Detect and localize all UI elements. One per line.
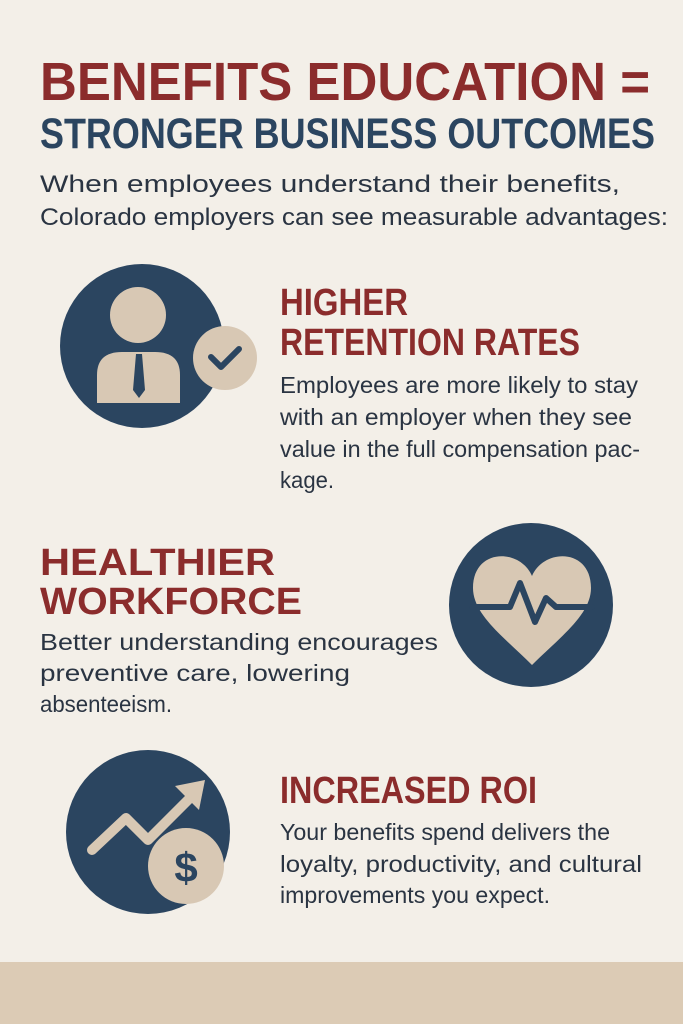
section 3: increased roi: loyalty, productivity, and cultural	[280, 851, 642, 877]
subtitle: When employees understand their benefits,	[40, 171, 620, 198]
footer band	[0, 962, 683, 1024]
section 1: higher retention rates	[279, 282, 640, 493]
section 2: healthier workforce: WORKFORCE	[40, 581, 302, 623]
section 1: higher retention rates: kage.	[280, 467, 334, 493]
section 1: higher retention rates: HIGHER	[280, 282, 408, 324]
subtitle: Colorado employers can see measurable advantages:	[40, 204, 668, 231]
section 3: increased roi: INCREASED ROI	[280, 770, 537, 812]
icon: growth arrow with dollar: $	[174, 844, 198, 891]
section 2: healthier workforce: preventive care, lowering	[40, 660, 350, 686]
section 1: higher retention rates: Employees are more likely to stay	[280, 372, 639, 398]
section 3: increased roi: improvements you expect.	[280, 882, 550, 908]
section 2: healthier workforce	[40, 542, 438, 717]
title	[40, 52, 655, 158]
section 2: healthier workforce: HEALTHIER	[40, 542, 275, 584]
section 2: healthier workforce: absenteeism.	[40, 691, 172, 717]
icon: employee with check	[60, 264, 257, 428]
subtitle	[40, 171, 668, 231]
icon: growth arrow with dollar	[66, 750, 230, 914]
section 1: higher retention rates: RETENTION RATES	[280, 322, 580, 364]
section 1: higher retention rates: with an employer when they see	[279, 404, 632, 430]
section 1: higher retention rates: value in the full compensation pac-	[280, 436, 640, 462]
icon: heart with pulse	[449, 523, 613, 687]
section 3: increased roi: Your benefits spend delivers the	[280, 819, 610, 845]
section 2: healthier workforce: Better understanding encourages	[40, 629, 438, 655]
section 3: increased roi	[280, 770, 642, 908]
title: BENEFITS EDUCATION =	[40, 52, 650, 112]
